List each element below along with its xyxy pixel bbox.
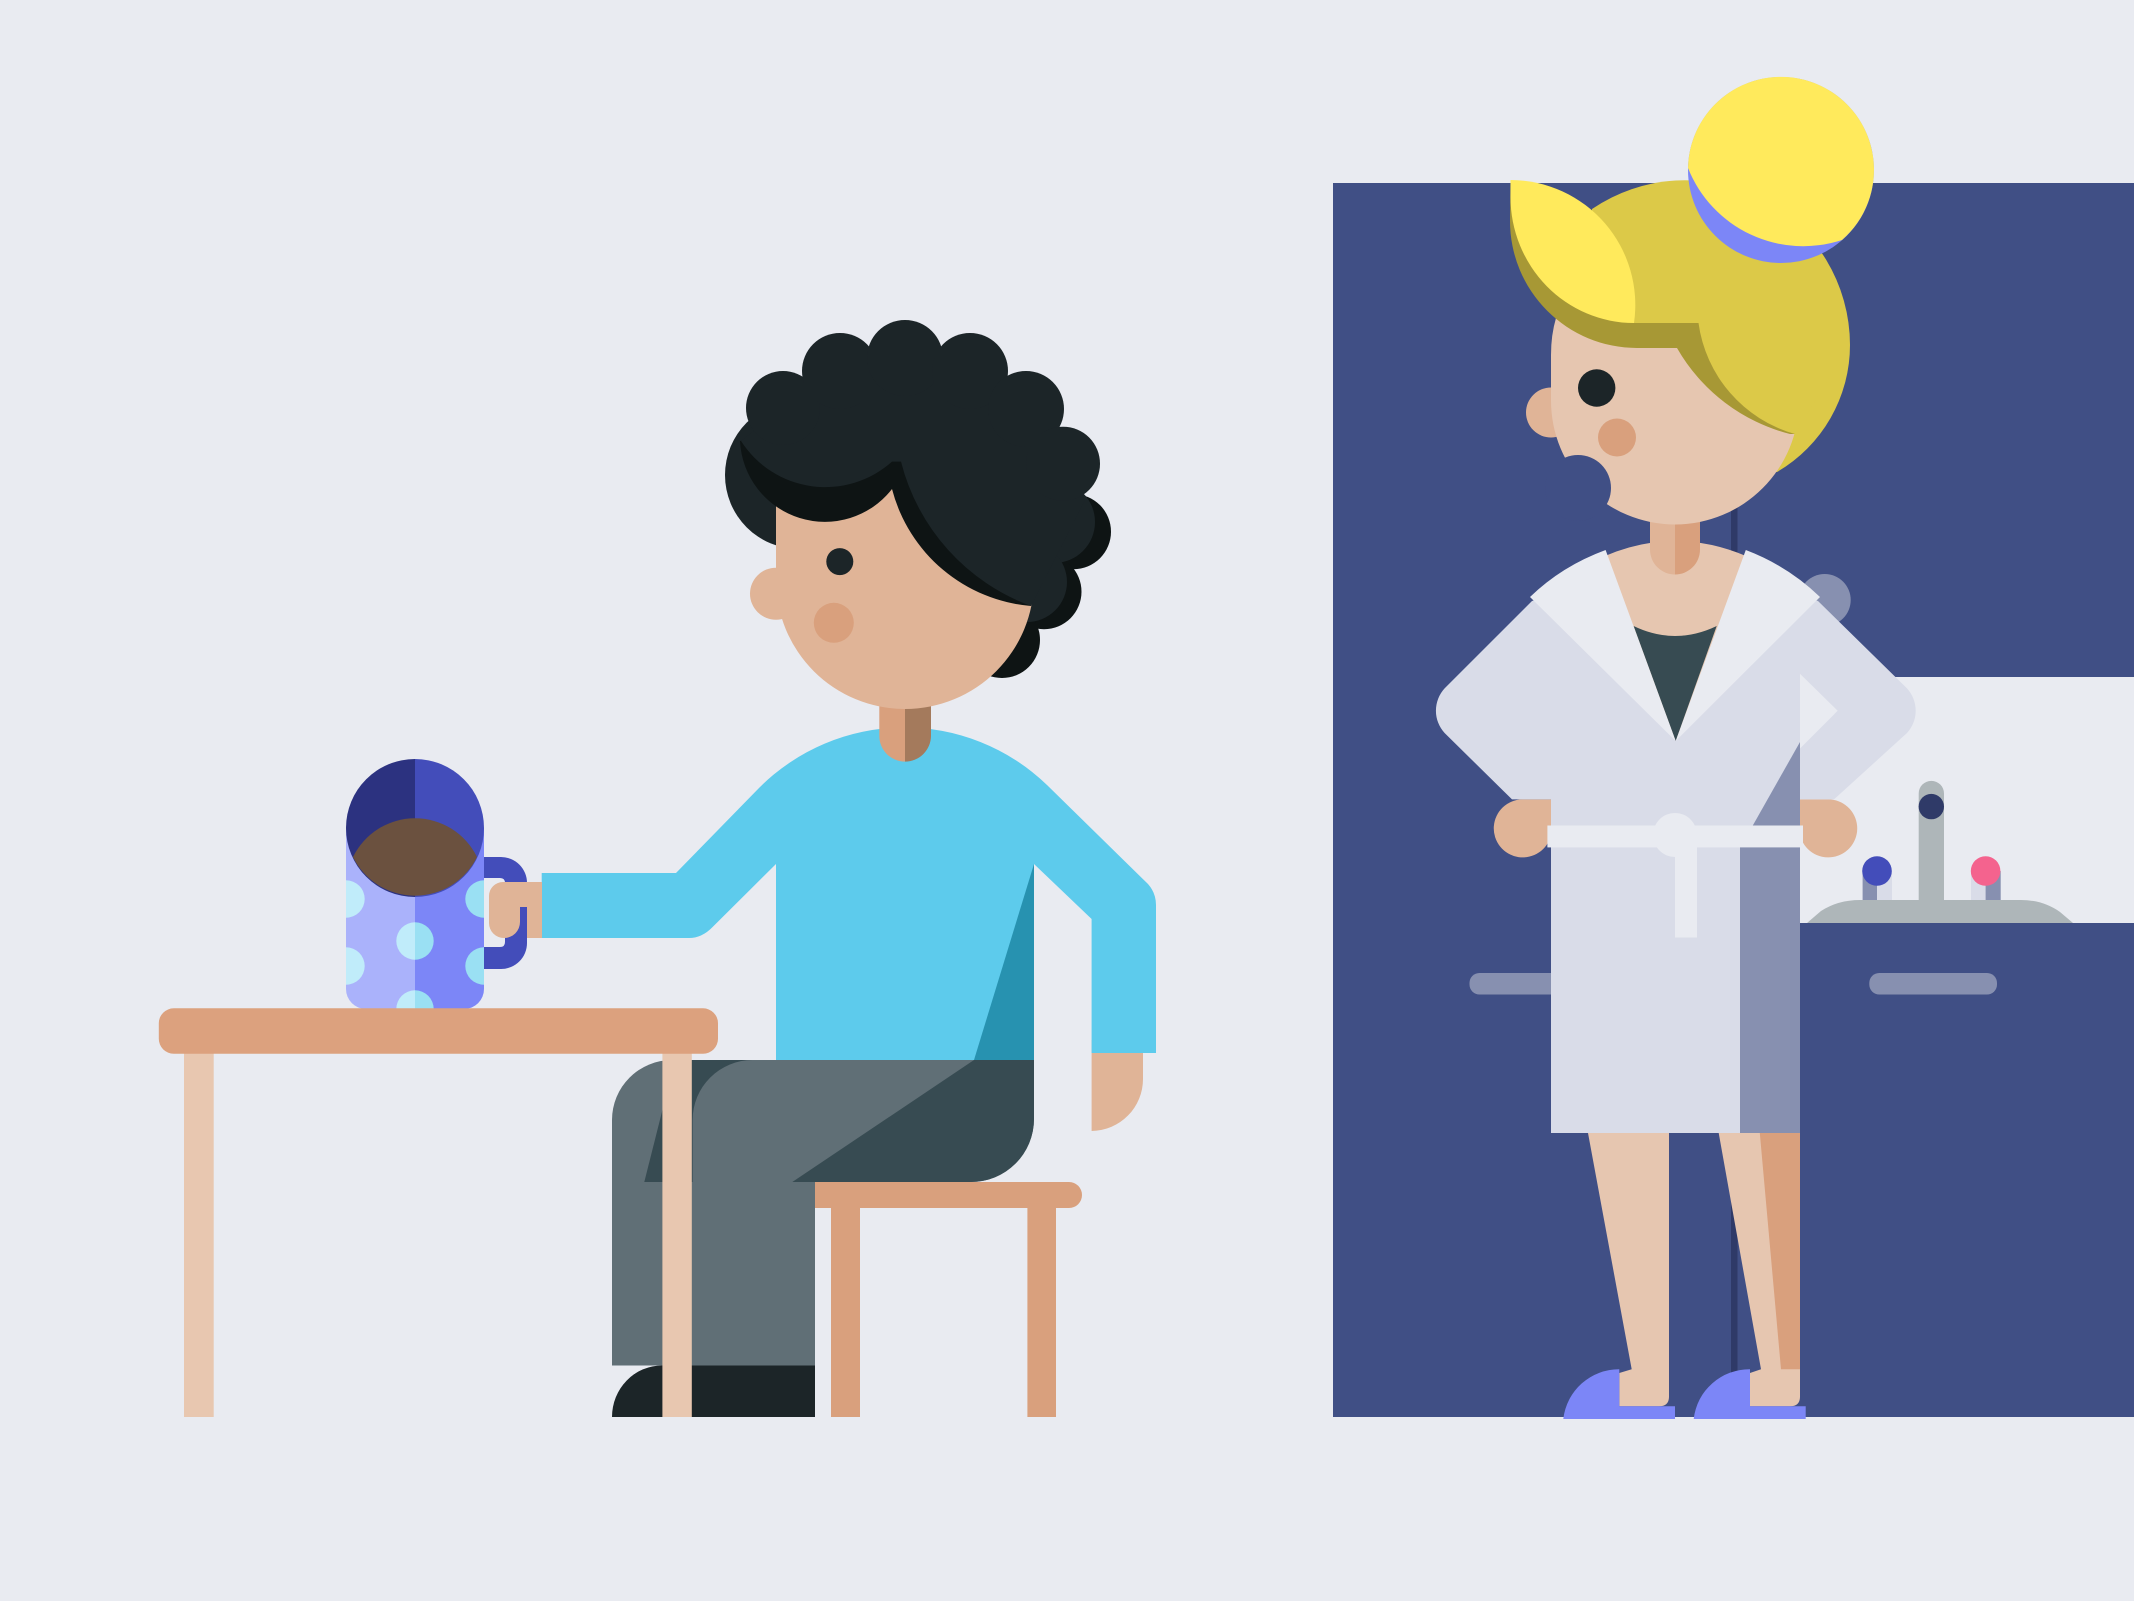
shirt <box>1634 626 1717 741</box>
eye <box>1578 369 1615 407</box>
table legs <box>184 1050 214 1417</box>
stool <box>800 1182 1082 1417</box>
coffee <box>353 818 477 896</box>
woman <box>1436 77 1916 1419</box>
legs <box>1588 1133 1800 1406</box>
hair bun <box>1688 77 1874 263</box>
coffee mug <box>346 759 527 1008</box>
fringe <box>1600 182 1849 434</box>
cold tap <box>1862 856 1892 900</box>
mug handle <box>484 857 527 969</box>
belt <box>1547 813 1803 938</box>
panel: kitchen cabinets <box>1333 183 2134 1417</box>
back leg <box>612 1060 760 1366</box>
cabinet divider <box>1731 183 1738 1417</box>
hair shadow <box>740 420 1060 606</box>
faucet <box>1919 781 1944 900</box>
front thigh shadow <box>792 1060 1034 1182</box>
right hand <box>1092 1040 1143 1131</box>
table top <box>159 1008 718 1054</box>
neck <box>879 680 931 762</box>
hand on mug <box>489 882 542 938</box>
mug body <box>346 828 484 1008</box>
chest <box>1605 541 1746 741</box>
cheek <box>814 603 854 643</box>
left drawer handle <box>1470 973 1580 994</box>
torso shadow <box>974 864 1034 1060</box>
back hair <box>725 401 1111 678</box>
mouth <box>1545 455 1611 521</box>
left lower cabinet <box>1333 183 1800 1417</box>
man <box>542 320 1156 1417</box>
torso and arms <box>542 727 1156 1060</box>
slippers <box>1563 1369 1806 1419</box>
sink and faucet <box>1807 781 2073 923</box>
head <box>1551 276 1799 524</box>
right drawer handle <box>1869 973 1997 994</box>
cheek <box>1598 418 1636 456</box>
robe <box>1436 580 1916 1133</box>
front leg <box>693 1060 1034 1366</box>
fringe highlight <box>1510 180 1635 323</box>
left hand <box>1494 799 1551 857</box>
front hair <box>741 320 1100 606</box>
left lapel <box>1530 550 1676 741</box>
ear <box>1526 388 1576 438</box>
hair back <box>1590 180 1850 480</box>
right hand <box>1800 799 1857 857</box>
ear <box>750 568 802 620</box>
upper cabinet <box>1333 183 2134 677</box>
hot tap <box>1971 856 2001 900</box>
right lapel <box>1676 550 1820 741</box>
back thigh shadow <box>644 1060 760 1182</box>
faucet cap <box>1919 794 1944 819</box>
sink basin <box>1807 900 2073 923</box>
shoes <box>612 1366 815 1417</box>
mug opening <box>346 759 484 897</box>
table <box>159 1008 718 1417</box>
neck <box>1650 510 1700 574</box>
robe shadow <box>1740 742 1800 1133</box>
fringe shadow <box>1510 180 1795 434</box>
eye <box>826 548 853 575</box>
head <box>776 440 1034 709</box>
sink base cabinet <box>1800 923 2134 1417</box>
upper cabinet knob <box>1799 574 1851 626</box>
